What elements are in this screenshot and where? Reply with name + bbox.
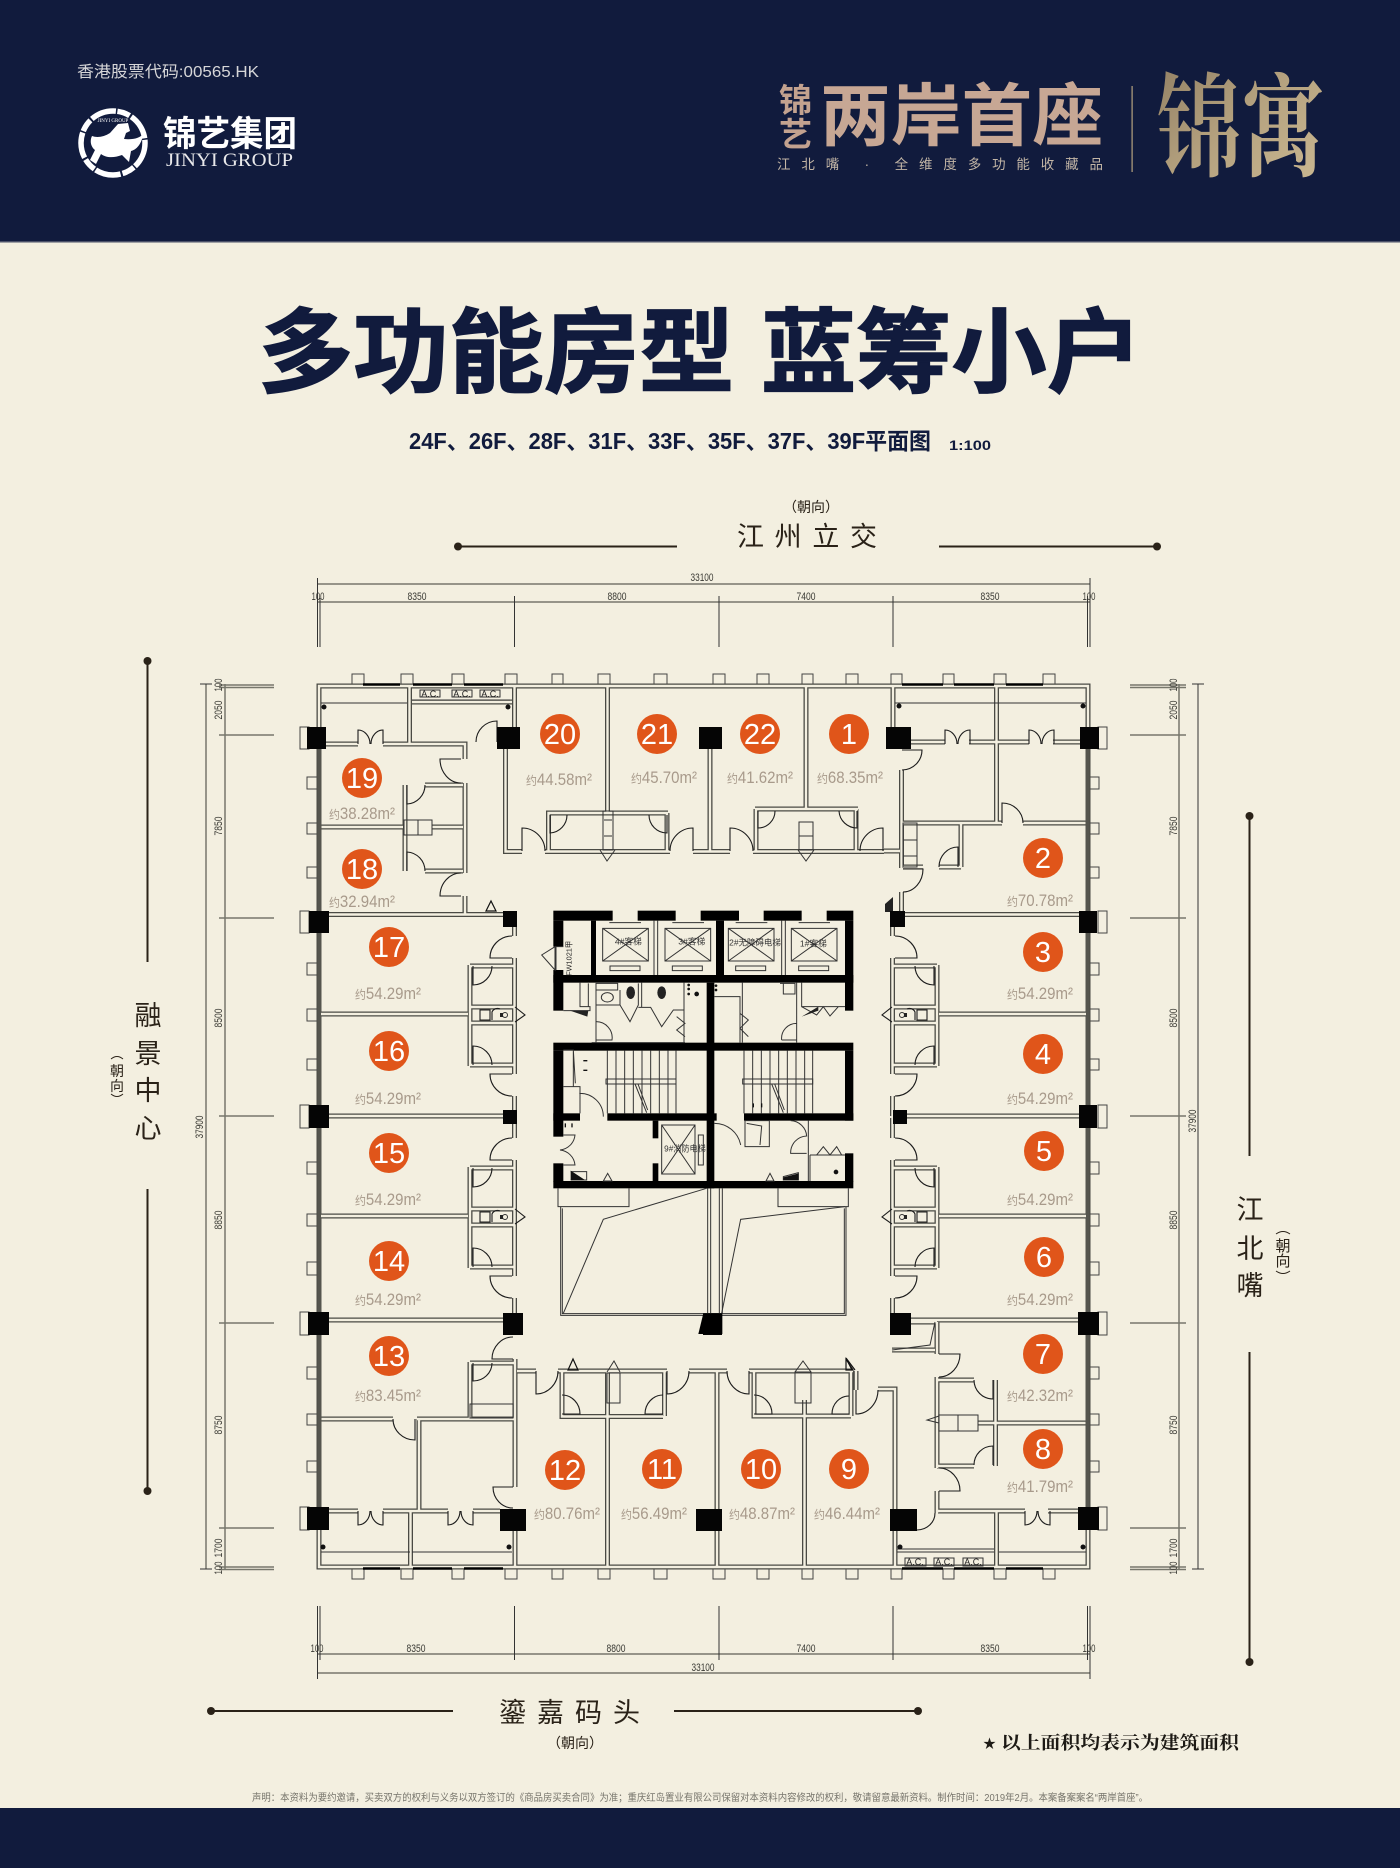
room 11: 约56.49m² — [621, 1505, 687, 1523]
elevator labels: 2#无障碍电梯 — [729, 937, 781, 948]
dimensions: left: 1700 — [213, 1538, 225, 1558]
room 10: 约48.87m² — [729, 1505, 795, 1523]
west note: 向 — [110, 1078, 124, 1094]
room 12: 12 — [549, 1455, 581, 1487]
project name: 两岸首座 — [820, 79, 1103, 155]
area note: ★ — [983, 1736, 996, 1751]
orientation: east: 江 — [1236, 1195, 1264, 1225]
room 11: 11 — [647, 1454, 677, 1486]
room 17 — [355, 927, 421, 1003]
dimensions: bottom: 8350 — [406, 1643, 426, 1655]
product name: 锦寓 — [1157, 39, 1325, 200]
elevator labels: 1#客梯 — [800, 938, 827, 949]
west note: 朝 — [110, 1063, 124, 1079]
orientation lines — [457, 546, 1157, 548]
room 13: 13 — [373, 1341, 405, 1373]
room 7: 约42.32m² — [1007, 1387, 1073, 1405]
room 10: 10 — [745, 1454, 777, 1486]
room 15: 15 — [373, 1138, 405, 1170]
room 8: 约41.79m² — [1007, 1478, 1073, 1496]
disclaimer: 声明：本资料为要约邀请，买卖双方的权利与义务以双方签订的《商品房买卖合同》为准；重庆红岛置业有限公司保留对本资料内容修改的权利，敬请留意最新资料。制作时间：2019年2月。本案备案案名“两岸首座”。 — [252, 1791, 1148, 1804]
dimensions: top: 8800 — [608, 591, 626, 603]
room 1: 约68.35m² — [817, 769, 883, 787]
sanitary and A.C. fixtures: A.C. — [481, 689, 499, 699]
orientation: east: 嘴 — [1236, 1271, 1264, 1301]
room 6: 6 — [1036, 1242, 1052, 1274]
elevator labels: 4#客梯 — [615, 935, 642, 946]
room 14: 约54.29m² — [355, 1291, 421, 1309]
dimensions: bottom — [310, 1606, 1096, 1679]
dimensions: right: 8850 — [1168, 1210, 1180, 1230]
dimensions: left: 8750 — [213, 1416, 225, 1434]
orientation name: 江州立交 — [737, 522, 877, 552]
room 17: 17 — [373, 932, 405, 964]
sanitary and A.C. fixtures: A.C. — [964, 1557, 982, 1567]
sanitary and A.C. fixtures: A.C. — [421, 689, 439, 699]
divider — [1132, 86, 1133, 172]
orientation: north — [454, 499, 1161, 552]
room 13: 约83.45m² — [355, 1387, 421, 1405]
dimensions: left: 100 — [213, 678, 225, 692]
room 9: 9 — [841, 1454, 857, 1486]
dimensions: top: 33100 — [690, 572, 714, 584]
room 14: 14 — [373, 1246, 405, 1278]
dimensions: right: 8500 — [1168, 1008, 1180, 1028]
orientation: west: 心 — [134, 1114, 162, 1144]
room 4 — [1007, 1034, 1073, 1108]
orientation: south — [207, 1698, 922, 1751]
dimensions: right: 37900 — [1187, 1110, 1199, 1132]
lift shaft void — [558, 1188, 848, 1334]
elevator cars — [603, 921, 837, 975]
icon: horse seal — [81, 111, 145, 175]
room 15 — [355, 1133, 421, 1209]
orientation: west: 融 — [134, 1001, 162, 1031]
exterior window fins — [300, 674, 1107, 1579]
doors — [358, 721, 1054, 1530]
room 19 — [329, 758, 395, 823]
dimensions: left: 37900 — [194, 1116, 206, 1138]
dimensions: bottom: 100 — [310, 1643, 324, 1655]
room 3 — [1007, 932, 1073, 1003]
room 4: 4 — [1035, 1039, 1051, 1071]
room 20: 约44.58m² — [526, 771, 592, 789]
walls — [319, 684, 1088, 1568]
dimensions: right: 100 — [1168, 678, 1180, 692]
stock code: 香港股票代码:00565.HK — [77, 63, 259, 81]
brand vertical — [779, 82, 812, 153]
logo wordmark: 锦艺集团 — [163, 115, 297, 154]
elevator labels — [564, 935, 827, 1154]
dimensions: top — [312, 572, 1096, 647]
orientation: west: 景 — [134, 1039, 162, 1069]
room 2: 2 — [1035, 843, 1051, 875]
room 20 — [526, 714, 592, 789]
room 17: 约54.29m² — [355, 985, 421, 1003]
dimensions: right: 7850 — [1168, 816, 1180, 836]
room 5: 约54.29m² — [1007, 1191, 1073, 1209]
room 3: 约54.29m² — [1007, 985, 1073, 1003]
sanitary and A.C. fixtures: A.C. — [453, 689, 471, 699]
footer band — [0, 1808, 1400, 1868]
logo english: JINYI GROUP — [166, 150, 293, 171]
dimensions: bottom: 8800 — [606, 1643, 626, 1655]
dimensions: right: 1700 — [1168, 1538, 1180, 1558]
east note: 朝 — [1275, 1238, 1291, 1255]
dimensions: bottom: 8350 — [980, 1643, 1000, 1655]
icon: horse seal: JINYI GROUP — [98, 119, 129, 124]
room 9: 约46.44m² — [814, 1505, 880, 1523]
orientation: south: 鎏嘉码头 — [499, 1698, 640, 1728]
logo: jinyi group — [81, 111, 297, 175]
title: 多功能房型 蓝筹小户 — [258, 303, 1142, 405]
core rooms — [542, 947, 845, 1181]
elevator labels: FW1021甲 — [564, 941, 573, 976]
elevator labels: 9#消防电梯 — [664, 1143, 706, 1154]
dimensions: top: 100 — [312, 591, 324, 603]
brand vertical: 艺 — [779, 116, 812, 153]
east note: 向 — [1275, 1253, 1291, 1270]
brand vertical: 锦 — [779, 82, 812, 119]
tagline: 江北嘴 · 全维度多功能收藏品 — [777, 156, 1103, 172]
dimensions: left: 8850 — [213, 1210, 225, 1230]
dimensions: right: 8750 — [1168, 1416, 1180, 1434]
dimensions: left: 7850 — [213, 816, 225, 836]
dimensions: top: 7400 — [796, 591, 816, 603]
orientation: east: 北 — [1236, 1234, 1264, 1264]
elevator labels: 3#客梯 — [678, 935, 705, 946]
west lines — [146, 661, 148, 1491]
room 18: 约32.94m² — [329, 893, 395, 911]
dimensions: right: 100 — [1168, 1562, 1180, 1574]
scale: 1:100 — [949, 437, 991, 453]
room 6 — [1007, 1237, 1073, 1309]
orientation: west: 中 — [134, 1076, 162, 1106]
room 21 — [631, 714, 697, 787]
room 16: 约54.29m² — [355, 1090, 421, 1108]
room 22 — [727, 714, 793, 787]
columns — [307, 727, 1099, 1531]
room 12: 约80.76m² — [534, 1505, 600, 1523]
sanitary and A.C. fixtures: A.C. — [935, 1557, 953, 1567]
dimensions: right: 2050 — [1168, 700, 1180, 720]
room 2: 约70.78m² — [1007, 892, 1073, 910]
room 6: 约54.29m² — [1007, 1291, 1073, 1309]
south note: （朝向） — [547, 1735, 603, 1751]
sanitary and A.C. fixtures — [320, 689, 1086, 1567]
room 15: 约54.29m² — [355, 1191, 421, 1209]
room 2 — [1007, 838, 1073, 910]
dimensions: top: 8350 — [408, 591, 426, 603]
floor plan — [300, 674, 1107, 1579]
room 8: 8 — [1035, 1434, 1051, 1466]
dimensions: left — [194, 678, 274, 1574]
room 18 — [329, 849, 395, 911]
room 22: 约41.62m² — [727, 769, 793, 787]
room 12 — [534, 1450, 600, 1523]
orientation: west — [110, 657, 162, 1495]
area note text: 以上面积均表示为建筑面积 — [1001, 1729, 1241, 1755]
core: elevators and stairs — [542, 911, 853, 1334]
orientation: north: （朝向） — [783, 499, 839, 515]
room 7 — [1007, 1334, 1073, 1405]
sanitary and A.C. fixtures: A.C. — [906, 1557, 924, 1567]
room 10 — [729, 1449, 795, 1523]
room 19: 19 — [346, 763, 378, 795]
subtitle: 24F、26F、28F、31F、33F、35F、37F、39F平面图 — [409, 428, 931, 454]
room 19: 约38.28m² — [329, 805, 395, 823]
room 5 — [1007, 1131, 1073, 1209]
project logo — [777, 39, 1325, 200]
room 16: 16 — [373, 1036, 405, 1068]
stairs — [606, 1051, 813, 1113]
room 9 — [814, 1449, 880, 1523]
room 18: 18 — [346, 854, 378, 886]
south lines — [210, 1710, 918, 1712]
room 11 — [621, 1449, 687, 1523]
room 14 — [355, 1241, 421, 1309]
room 7: 7 — [1035, 1339, 1051, 1371]
room 8 — [1007, 1429, 1073, 1496]
room 1 — [817, 714, 883, 787]
dimensions: top: 100 — [1082, 591, 1096, 603]
orientation: east — [1236, 812, 1291, 1666]
east lines — [1248, 816, 1250, 1662]
dimensions: bottom: 33100 — [692, 1662, 714, 1674]
dimensions: top: 8350 — [980, 591, 1000, 603]
bathroom pairs — [321, 916, 1086, 1318]
east note — [1275, 1232, 1291, 1274]
dimensions: left: 8500 — [213, 1008, 225, 1028]
room 22: 22 — [744, 719, 776, 751]
dimensions: right — [1130, 678, 1204, 1574]
room 21: 约45.70m² — [631, 769, 697, 787]
room 21: 21 — [641, 719, 673, 751]
dimensions: bottom: 100 — [1082, 1643, 1096, 1655]
area note — [983, 1729, 1241, 1755]
west note — [110, 1056, 124, 1096]
header band — [0, 0, 1400, 242]
room 13 — [355, 1336, 421, 1405]
core walls — [553, 911, 853, 1188]
room 1: 1 — [841, 719, 857, 751]
room 4: 约54.29m² — [1007, 1090, 1073, 1108]
dimensions: left: 2050 — [213, 700, 225, 720]
room 3: 3 — [1035, 937, 1051, 969]
room 20: 20 — [544, 719, 576, 751]
room 16 — [355, 1031, 421, 1108]
dimensions: left: 100 — [213, 1562, 225, 1574]
room 5: 5 — [1036, 1136, 1052, 1168]
dimensions: bottom: 7400 — [796, 1643, 816, 1655]
